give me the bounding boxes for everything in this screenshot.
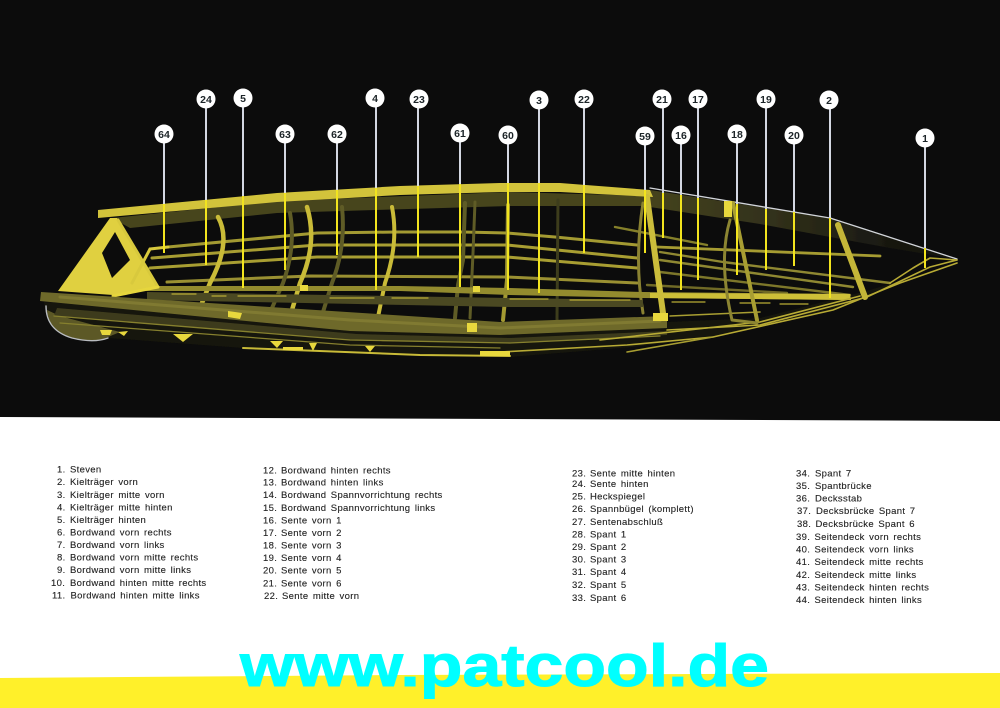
parts list column 2: Bordwand hinten links — [281, 478, 384, 488]
parts list column 3: Heckspiegel — [590, 492, 645, 502]
parts list column 2: 18. — [263, 540, 277, 552]
callout 59 — [636, 126, 654, 253]
parts list column 3: Spant 2 — [590, 542, 626, 553]
hull bottom white outline — [46, 306, 108, 341]
parts list column 3: 27. — [572, 517, 586, 528]
hull lines front — [500, 260, 957, 352]
callout 60 — [498, 126, 518, 290]
parts list column 2: Bordwand Spannvorrichtung rechts — [281, 490, 443, 501]
parts list column 3: 28. — [572, 530, 586, 540]
parts list column 1: 4. — [57, 502, 66, 514]
callout 21 — [652, 90, 672, 238]
parts list column 3: Spant 6 — [590, 593, 626, 604]
parts list column 2: Sente mitte vorn — [282, 591, 359, 602]
black photo panel — [0, 0, 1000, 421]
parts list column 2: Sente vorn 5 — [281, 566, 342, 576]
parts list column 1: 9. — [57, 565, 66, 576]
callout 23: 23 — [413, 94, 425, 106]
parts list column 4: Seitendeck mitte links — [814, 570, 916, 581]
callout 61 — [450, 124, 470, 287]
parts list column 4: 43. — [796, 582, 810, 594]
parts list column 4: Seitendeck mitte rechts — [814, 557, 924, 568]
parts list column 1: 6. — [57, 528, 66, 538]
callout 2: 2 — [826, 95, 832, 107]
lower dark rail band — [54, 308, 667, 343]
parts list column 1: 2. — [57, 477, 66, 488]
parts list column 4: Seitendeck hinten rechts — [814, 582, 929, 594]
stem brace — [113, 287, 158, 296]
parts list column 3: 26. — [572, 504, 586, 515]
yellow footer band — [0, 673, 1000, 708]
parts list column 4: 38. — [797, 519, 811, 530]
hull stern bulge — [47, 310, 120, 341]
parts list column 2: 16. — [263, 516, 277, 526]
stringers rear — [150, 232, 637, 283]
parts list column 1: Kielträger mitte vorn — [70, 490, 165, 501]
parts list column 1: Kielträger mitte hinten — [70, 502, 173, 514]
parts list column 4: 34. — [796, 468, 810, 480]
parts list column 4: Decksstab — [815, 494, 862, 504]
boat frame illustration — [40, 183, 957, 357]
parts list column 2: Bordwand Spannvorrichtung links — [281, 503, 435, 514]
parts list column 4: Seitendeck vorn links — [814, 544, 914, 556]
parts list column 4: Seitendeck vorn rechts — [814, 532, 921, 543]
callout 60: 60 — [502, 130, 514, 142]
callout 3: 3 — [536, 95, 542, 107]
parts list column 2: 22. — [264, 591, 278, 602]
hull keel bottom — [243, 348, 510, 356]
bright blocks — [100, 201, 732, 356]
callout 20 — [784, 126, 804, 266]
dark inner side band front — [650, 190, 957, 259]
parts list column 1: Kielträger hinten — [70, 515, 146, 526]
callout 62 — [328, 124, 346, 255]
callout 17: 17 — [692, 94, 704, 106]
lower rib ends and rear bright ribs — [202, 205, 508, 320]
parts list column 1: Bordwand vorn mitte links — [70, 565, 191, 576]
hull lower body — [44, 263, 957, 357]
callout 22 — [574, 90, 594, 253]
parts list column 2: 13. — [263, 478, 277, 488]
parts list column 3: Sente mitte hinten — [590, 468, 675, 480]
parts list column 3: Spant 4 — [590, 567, 626, 578]
parts list column 2: 19. — [263, 553, 277, 564]
parts list column 2: 21. — [263, 578, 277, 590]
website watermark: www.patcool.de — [239, 632, 769, 699]
parts list column 4: 41. — [796, 557, 810, 568]
parts list column 3: 32. — [572, 580, 586, 591]
callout 62: 62 — [331, 129, 343, 141]
parts list column 3: Spant 5 — [590, 580, 626, 591]
callout 4: 4 — [372, 93, 378, 105]
parts list column 1 — [51, 464, 206, 602]
parts list column 1: 3. — [57, 490, 66, 501]
callout 59: 59 — [639, 131, 651, 143]
rail shadow lines — [54, 316, 660, 348]
parts list column 3: 33. — [572, 593, 586, 604]
callout 21: 21 — [656, 94, 668, 106]
parts list column 2: Bordwand hinten rechts — [281, 466, 391, 476]
parts list column 1: 11. — [52, 590, 65, 602]
callout 17 — [688, 90, 708, 280]
callout 63: 63 — [279, 129, 291, 141]
callout 64: 64 — [158, 129, 170, 141]
dark inner side band rear — [112, 192, 650, 228]
parts list column 2: 15. — [263, 503, 277, 514]
parts list column 1: Bordwand hinten mitte links — [70, 590, 200, 602]
parts list column 3: Sente hinten — [590, 479, 649, 490]
parts list column 2: 17. — [263, 528, 277, 539]
callout 16 — [672, 126, 690, 290]
stem right frame — [118, 220, 168, 287]
callout 3 — [530, 90, 548, 293]
parts list column 1: 7. — [57, 540, 66, 551]
callout 4 — [366, 88, 384, 290]
parts list column 1: Bordwand hinten mitte rechts — [70, 578, 206, 589]
parts list column 4: 44. — [796, 595, 810, 606]
parts list column 4: 36. — [796, 494, 810, 504]
callout 64 — [154, 124, 174, 253]
parts list column 3 — [572, 468, 694, 604]
near inner rail — [123, 286, 850, 300]
callout 61: 61 — [454, 128, 466, 140]
parts list column 3: Spant 3 — [590, 554, 626, 566]
parts list column 4: 35. — [796, 481, 810, 492]
parts list column 1: Steven — [70, 464, 102, 476]
parts list column 2 — [263, 466, 443, 602]
parts list column 2: Sente vorn 3 — [281, 540, 342, 552]
parts list column 1: 8. — [57, 552, 66, 564]
keel accent — [627, 312, 760, 352]
stringers front — [615, 227, 890, 295]
bow wave line — [890, 258, 957, 283]
parts list column 2: Sente vorn 6 — [281, 578, 342, 590]
second rail with cutouts — [147, 292, 643, 307]
callout 5 — [234, 88, 252, 288]
callout 22: 22 — [578, 94, 590, 106]
callout 24 — [196, 90, 216, 265]
callout 24: 24 — [200, 94, 212, 106]
parts list column 1: Kielträger vorn — [70, 477, 138, 488]
parts list column 2: 12. — [263, 466, 277, 476]
callout 19: 19 — [760, 94, 772, 106]
parts list column 1: Bordwand vorn links — [70, 540, 165, 551]
near rail highlight — [60, 297, 660, 328]
parts list column 1: 10. — [51, 578, 65, 589]
callout 19 — [756, 90, 776, 270]
parts list column 3: 23. — [572, 468, 586, 480]
bow white edge — [650, 188, 957, 259]
callout 5: 5 — [240, 93, 246, 105]
parts list column 3: Sentenabschluß — [590, 517, 663, 528]
parts list column 1: 5. — [57, 515, 66, 526]
callout 16: 16 — [675, 130, 687, 142]
parts list column 2: Sente vorn 1 — [281, 516, 342, 526]
parts list column 3: 30. — [572, 554, 586, 566]
parts list column 3: Spant 1 — [590, 530, 626, 540]
parts list column 2: 20. — [263, 566, 277, 576]
callout 63 — [276, 124, 294, 270]
parts list column 4: 40. — [796, 544, 810, 556]
callout 18: 18 — [731, 129, 743, 141]
parts list column 2: 14. — [263, 490, 277, 501]
near main rail — [40, 292, 667, 335]
rail cutout highlights — [172, 294, 808, 304]
parts list column 2: Sente vorn 2 — [281, 528, 342, 539]
parts list column 1: 1. — [57, 464, 66, 476]
callout 1: 1 — [922, 133, 928, 145]
callout 1 — [916, 128, 934, 268]
stem plate — [58, 218, 158, 295]
parts list column 3: 29. — [572, 542, 586, 553]
callout 20: 20 — [788, 130, 800, 142]
parts list column 3: 25. — [572, 492, 586, 502]
parts list column 4: 42. — [796, 570, 810, 581]
parts list column 4: Decksbrücke Spant 7 — [816, 506, 915, 517]
callout 2 — [820, 90, 838, 298]
parts list column 4: 39. — [796, 532, 810, 543]
parts list column 4: Seitendeck hinten links — [814, 595, 922, 606]
parts list column 4: Decksbrücke Spant 6 — [816, 519, 915, 530]
top rail — [98, 183, 653, 218]
parts list column 3: 24. — [572, 479, 586, 490]
parts list column 4 — [796, 468, 929, 606]
parts list column 4: Spantbrücke — [815, 481, 872, 492]
parts list column 1: Bordwand vorn rechts — [70, 528, 172, 538]
big frame — [647, 197, 865, 323]
parts list column 1: Bordwand vorn mitte rechts — [70, 552, 198, 564]
callout 23 — [410, 90, 428, 257]
parts list column 3: 31. — [572, 567, 586, 578]
callout 18 — [728, 124, 746, 275]
parts list column 4: Spant 7 — [815, 468, 852, 480]
parts list column 4: 37. — [797, 506, 811, 517]
parts list column 3: Spannbügel (komplett) — [590, 504, 694, 515]
dim ribs — [272, 200, 643, 320]
parts list column 2: Sente vorn 4 — [281, 553, 342, 564]
